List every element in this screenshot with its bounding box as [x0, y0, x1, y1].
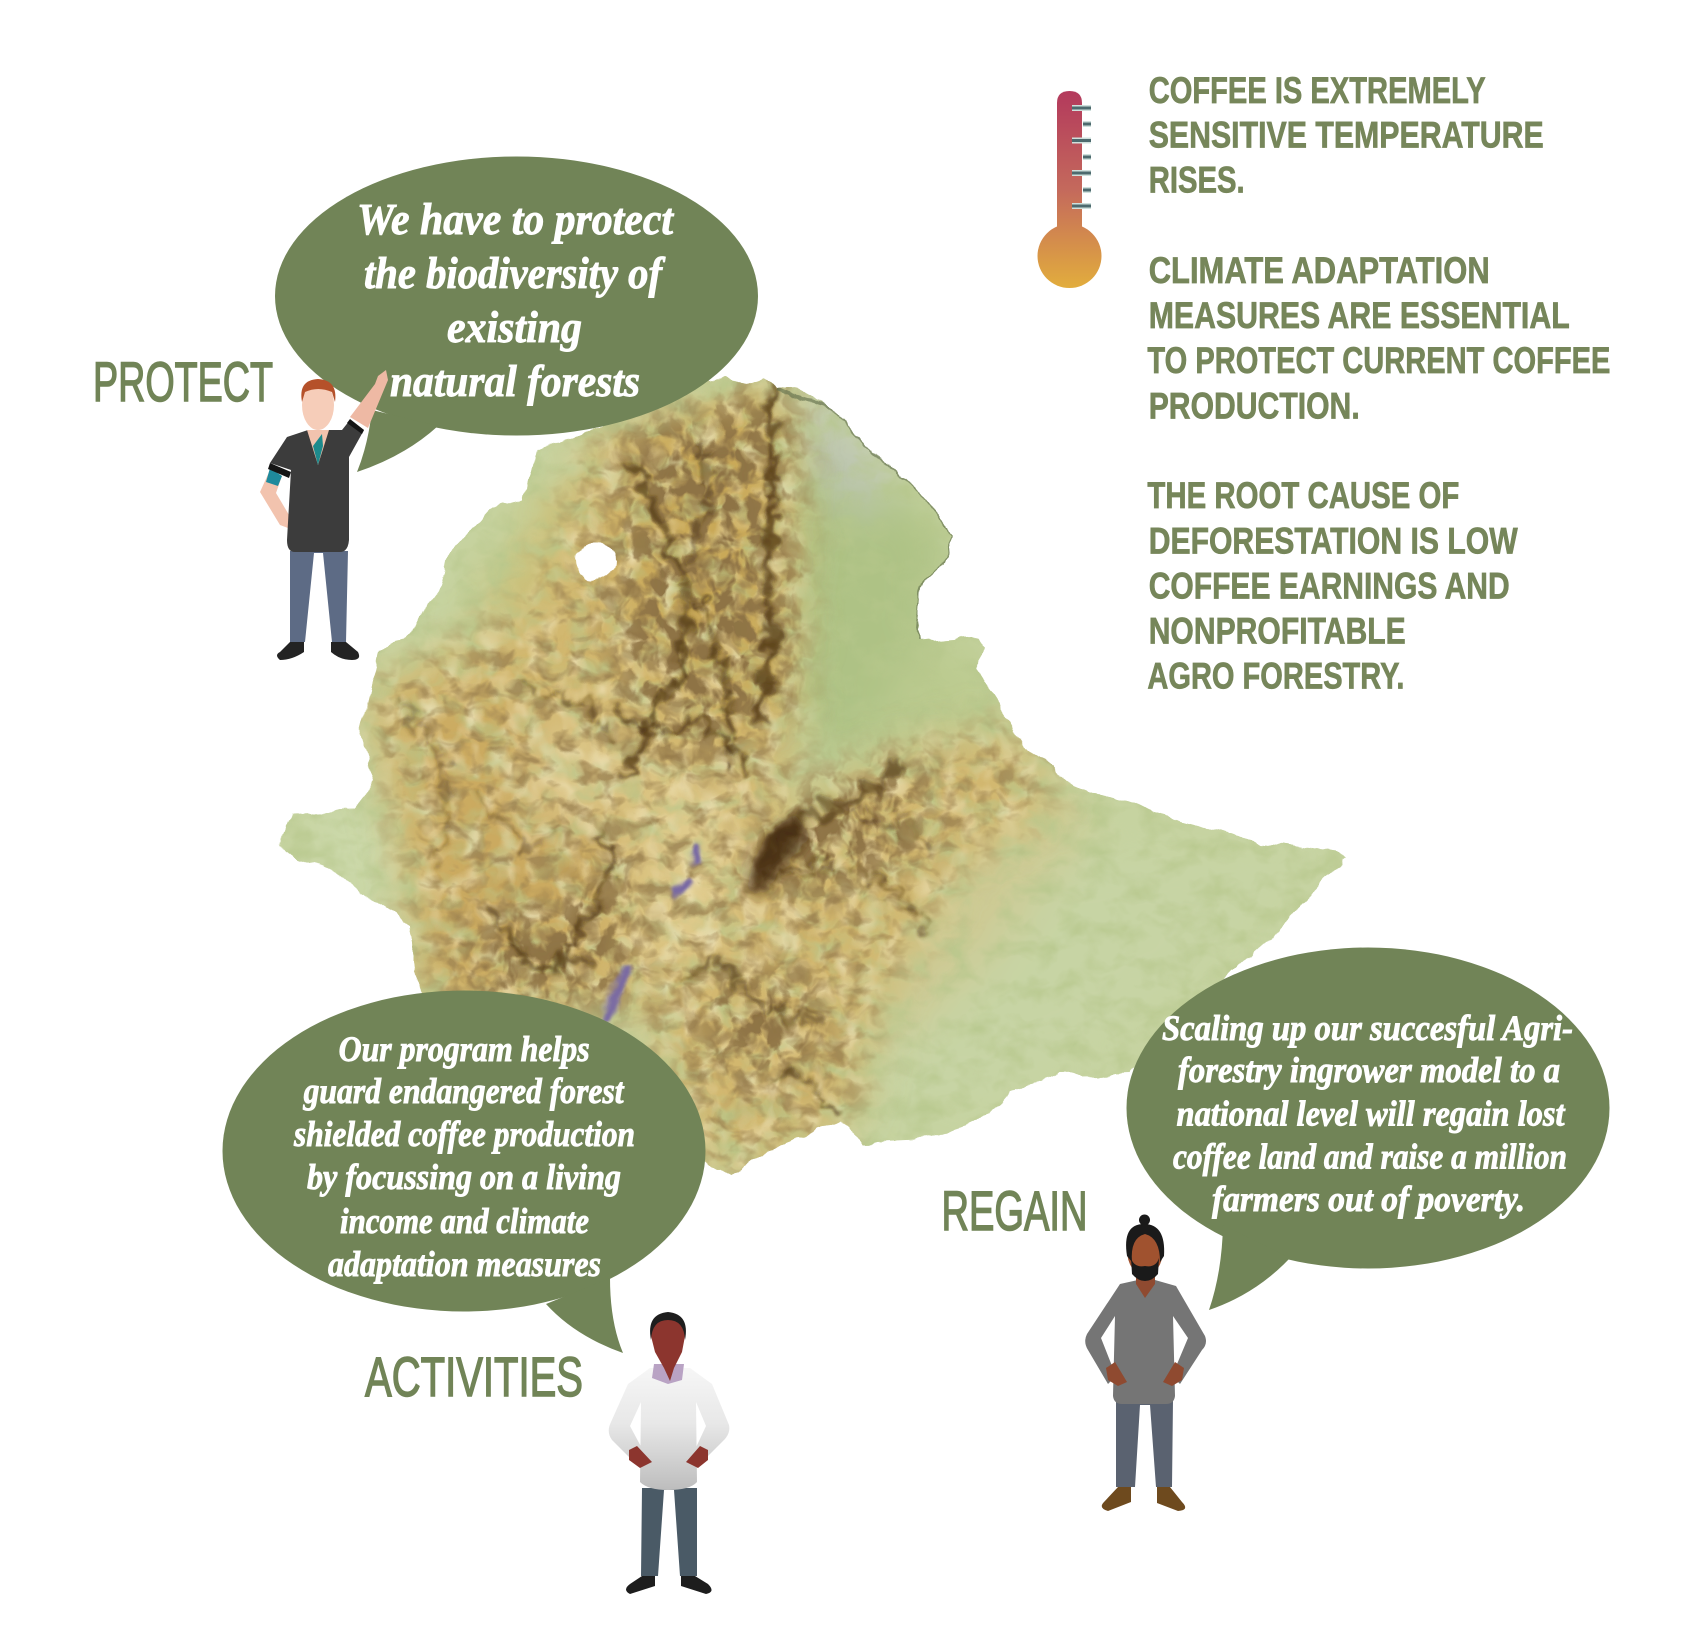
- map ridges and valleys: [400, 385, 930, 1110]
- protect bubble text: We have to protect: [357, 195, 675, 244]
- protect bubble text: natural forests: [390, 357, 640, 406]
- map: relief map of Ethiopia: [278, 376, 1346, 1175]
- figure: man in white shirt: [609, 1312, 729, 1594]
- regain bubble text: Scaling up our succesful Agri-: [1162, 1008, 1573, 1048]
- map: white hole: [577, 542, 615, 580]
- regain bubble text: coffee land and raise a million: [1173, 1136, 1567, 1176]
- text block: adaptation measures: [1147, 250, 1610, 427]
- regain bubble text: forestry ingrower model to a: [1178, 1050, 1560, 1090]
- activities bubble text: adaptation measures: [328, 1244, 601, 1284]
- figure: man pointing in dark shirt: [260, 370, 388, 660]
- icon: thermometer: [1038, 91, 1102, 288]
- protect bubble text: the biodiversity of: [364, 249, 666, 298]
- text block: climate sensitivity: RISES.: [1149, 160, 1245, 201]
- regain bubble text: farmers out of poverty.: [1212, 1179, 1525, 1219]
- regain bubble text: national level will regain lost: [1176, 1094, 1565, 1134]
- text block: root cause of deforestation: NONPROFITABLE: [1149, 611, 1406, 652]
- text block: adaptation measures: PRODUCTION.: [1149, 386, 1360, 427]
- text block: climate sensitivity: COFFEE IS EXTREMELY: [1149, 70, 1486, 111]
- text block: root cause of deforestation: [1147, 475, 1518, 697]
- activities bubble text: guard endangered forest: [303, 1071, 624, 1111]
- speech bubble: protect: [275, 156, 758, 472]
- protect bubble text: existing: [447, 303, 582, 352]
- label: REGAIN: REGAIN: [942, 1179, 1088, 1242]
- map: rift valley lakes: [604, 848, 697, 1018]
- text block: root cause of deforestation: AGRO FORESTRY.: [1147, 656, 1404, 697]
- map: dark basin: [745, 815, 810, 895]
- map: coast shadow line: [775, 391, 956, 641]
- label: PROTECT: PROTECT: [93, 350, 273, 413]
- activities bubble text: income and climate: [340, 1201, 589, 1241]
- activities bubble text: Our program helps: [339, 1029, 590, 1069]
- activities bubble text: shielded coffee production: [293, 1114, 635, 1154]
- text block: root cause of deforestation: DEFORESTATION IS LOW: [1149, 520, 1518, 561]
- protect bubble text: [357, 195, 675, 406]
- activities bubble text: by focussing on a living: [307, 1157, 621, 1197]
- speech bubble: activities: [222, 990, 706, 1353]
- speech bubble: regain: [1126, 948, 1610, 1310]
- regain bubble text: [1162, 1008, 1573, 1219]
- text block: adaptation measures: MEASURES ARE ESSENTIAL: [1149, 295, 1570, 336]
- figure: man with beard in grey shirt: [1085, 1214, 1206, 1511]
- map texture: [283, 376, 1342, 1164]
- text block: climate sensitivity: [1149, 70, 1544, 201]
- text block: root cause of deforestation: THE ROOT CAUSE OF: [1147, 475, 1459, 516]
- text block: adaptation measures: CLIMATE ADAPTATION: [1149, 250, 1490, 291]
- text block: climate sensitivity: SENSITIVE TEMPERATURE: [1149, 114, 1544, 156]
- activities bubble text: [293, 1029, 635, 1284]
- text block: root cause of deforestation: COFFEE EARNINGS AND: [1149, 566, 1510, 606]
- label: ACTIVITIES: ACTIVITIES: [365, 1345, 583, 1408]
